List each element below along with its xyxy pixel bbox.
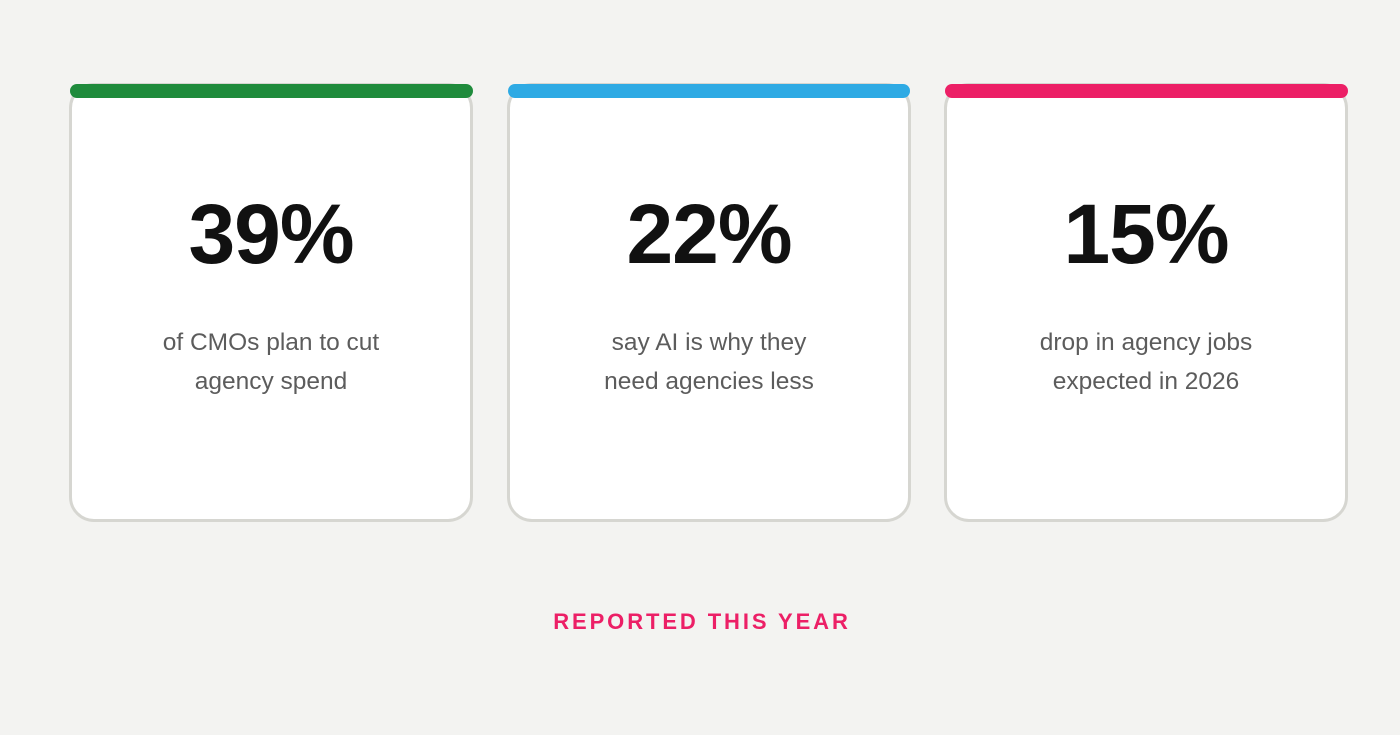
panel: card 15%: [944, 83, 1348, 522]
text: agency jobs drop: [1040, 329, 1252, 394]
text: CMOs agency spend: of CMOs plan to cut: [163, 329, 379, 356]
text: CMOs agency spend: [163, 329, 379, 394]
accent bar: blue: [508, 84, 910, 98]
accent bar: green: [70, 84, 472, 98]
text: CMOs agency spend: agency spend: [195, 368, 347, 394]
statistic: 15%: 15%: [1063, 187, 1229, 281]
text: AI reason: need agencies less: [604, 368, 814, 394]
accent bar: pink: [945, 84, 1348, 98]
footer caption: REPORTED THIS YEAR: [553, 609, 851, 634]
statistic: 22%: 22%: [626, 187, 792, 281]
panel: card 39%: [69, 83, 473, 522]
text: agency jobs drop: expected in 2026: [1053, 368, 1239, 394]
text: AI reason: say AI is why they: [612, 329, 806, 356]
statistic: 39%: 39%: [188, 187, 354, 281]
panel: card 22%: [507, 83, 911, 522]
text: AI reason: [604, 329, 814, 394]
text: agency jobs drop: drop in agency jobs: [1040, 329, 1252, 356]
